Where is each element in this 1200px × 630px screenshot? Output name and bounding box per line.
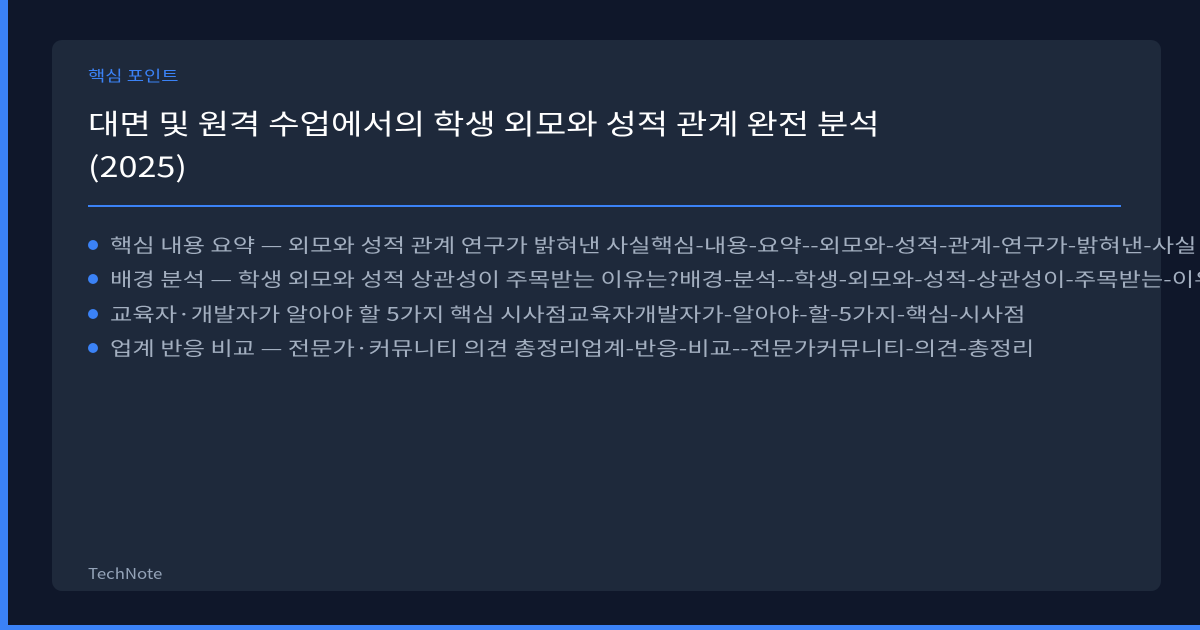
left accent bar: [0, 0, 8, 630]
footer brand: TechNote: [88, 563, 162, 584]
bullet 3: 교육자·개발자가 알아야 할 5가지 핵심 시사점교육자개발자가-알아야-할-5가지-핵심-시사점: [110, 300, 1026, 327]
title: [88, 103, 880, 186]
bullet 4: 업계 반응 비교 — 전문가·커뮤니티 의견 총정리업계-반응-비교--전문가커뮤니티-의견-총정리: [110, 334, 1034, 361]
title: (2025): [88, 146, 187, 186]
bullet list: [88, 231, 1200, 361]
bottom accent bar: [0, 625, 1200, 630]
bullet 1: 핵심 내용 요약 — 외모와 성적 관계 연구가 밝혀낸 사실핵심-내용-요약--외모와-성적-관계-연구가-밝혀낸-사실: [110, 231, 1196, 258]
kicker label: 핵심 포인트: [88, 65, 178, 86]
title: 대면 및 원격 수업에서의 학생 외모와 성적 관계 완전 분석: [88, 103, 880, 143]
